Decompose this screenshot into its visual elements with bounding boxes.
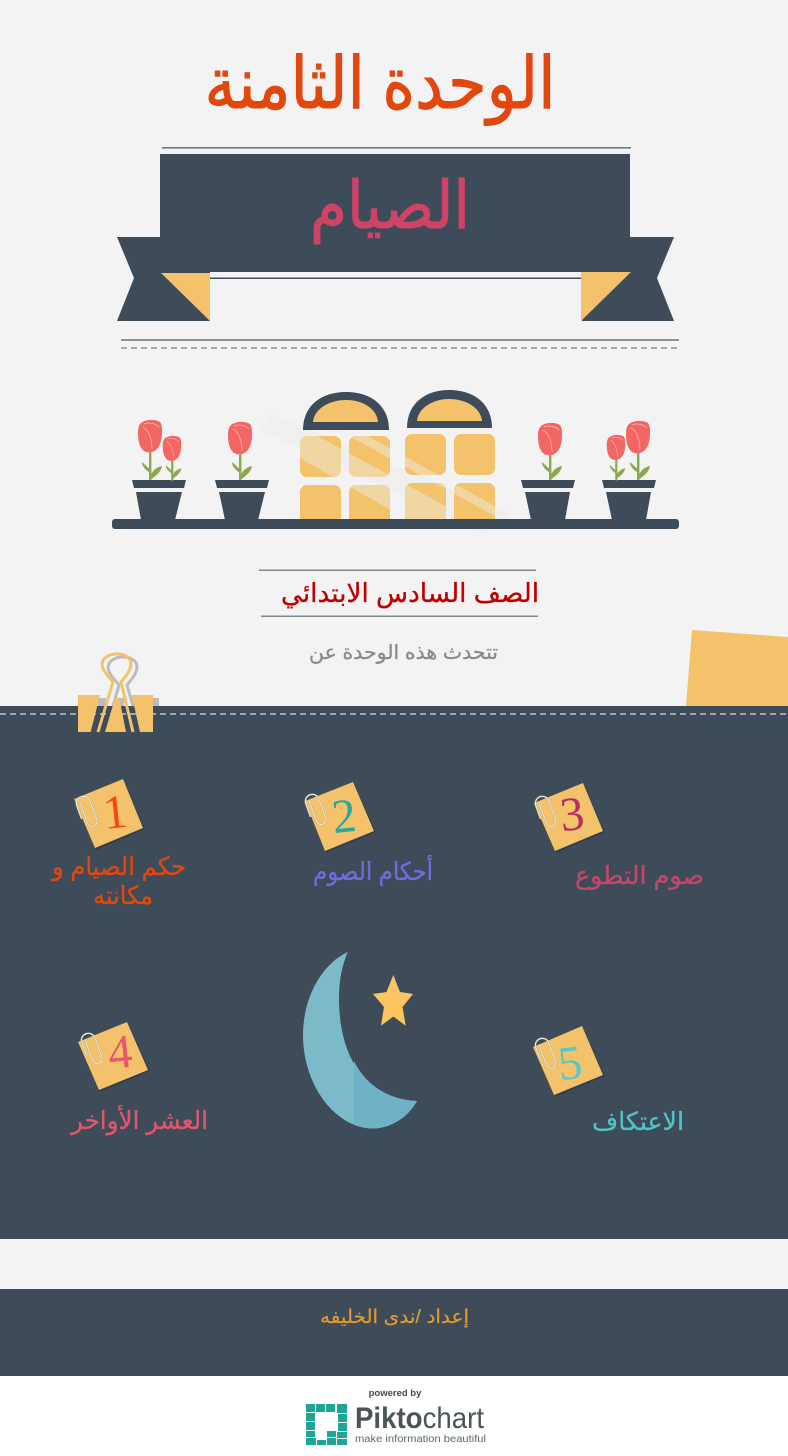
shelf	[112, 519, 679, 529]
sticky note 3: 3	[557, 787, 587, 842]
grade heading with rules: الصف السادس الابتدائي	[281, 578, 539, 608]
ribbon fold left	[161, 273, 210, 321]
item 1	[50, 779, 186, 910]
window reflection band	[260, 413, 510, 535]
tagline: make information beautiful	[355, 1433, 486, 1445]
sticky note 3	[533, 783, 605, 853]
intro text: تتحدث هذه الوحدة عن	[309, 642, 498, 664]
item 4 label: العشر الأواخر	[69, 1104, 208, 1136]
crescent moon and star	[303, 952, 417, 1128]
item 1 label: حكم الصيام و	[50, 853, 186, 882]
item 3 label: صوم التطوع	[575, 862, 704, 890]
flower pot 2	[215, 422, 269, 520]
illustration: window shelf with flowers	[112, 390, 679, 544]
yellow corner note	[686, 630, 788, 706]
sticky note 4: 4	[105, 1025, 135, 1080]
title: الوحدة الثامنة	[204, 44, 556, 126]
window left	[300, 392, 390, 519]
flower pot 1	[132, 420, 186, 520]
item 1 label: مكانته	[93, 882, 153, 910]
branding strip	[0, 1376, 788, 1456]
ribbon heading: الصيام	[310, 168, 470, 244]
item 5	[533, 1026, 684, 1136]
star	[373, 975, 413, 1026]
sticky note 2: 2	[329, 789, 359, 844]
item 1 label	[50, 853, 186, 910]
powered by: powered by	[369, 1388, 422, 1399]
piktochart wordmark: Piktochart	[355, 1402, 485, 1435]
author credit: إعداد /ندى الخليفه	[320, 1307, 469, 1329]
flower pot 4	[602, 421, 656, 520]
binder clip icon	[78, 654, 159, 732]
sticky note 1: 1	[100, 785, 130, 840]
ribbon banner	[117, 147, 674, 321]
divider lines under ribbon	[121, 339, 679, 348]
crescent	[303, 952, 417, 1128]
item 2	[303, 782, 433, 886]
flower pot 3	[521, 423, 575, 520]
main dark panel	[0, 706, 788, 1239]
item 2 label: أحكام الصوم	[313, 854, 433, 886]
ribbon fold right	[581, 272, 631, 321]
item 3	[533, 783, 704, 890]
piktochart logo mark	[306, 1404, 347, 1445]
footer bar	[0, 1289, 788, 1376]
sticky note 5	[533, 1026, 605, 1097]
window right	[405, 390, 495, 519]
item 4	[69, 1022, 208, 1136]
sticky note 5: 5	[555, 1036, 585, 1091]
item 5 label: الاعتكاف	[592, 1108, 684, 1136]
